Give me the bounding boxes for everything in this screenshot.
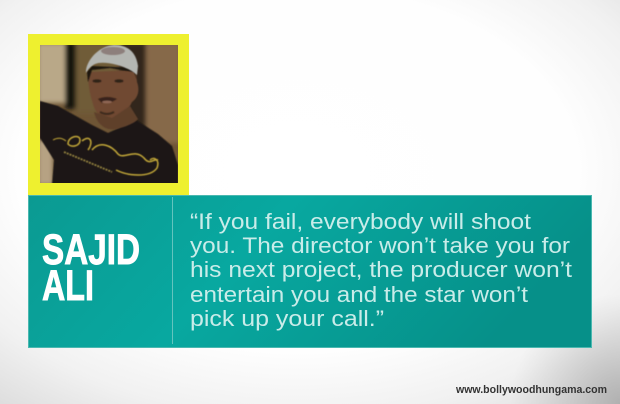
divider — [172, 197, 173, 344]
quote text: you. The director won’t take you for — [190, 233, 571, 258]
quote text — [190, 209, 573, 331]
website url: www.bollywoodhungama.com — [455, 384, 607, 396]
quote text: entertain you and the star won’t — [190, 282, 529, 307]
shirt logo — [53, 137, 158, 175]
teal quote panel — [28, 196, 592, 348]
name heading: SAJID — [42, 226, 140, 274]
face and neck — [88, 70, 138, 120]
portrait photo — [38, 43, 180, 185]
t-shirt — [40, 101, 178, 185]
hair edge — [87, 66, 137, 82]
name heading: ALI — [42, 262, 94, 310]
name heading — [42, 226, 140, 310]
yellow photo frame — [28, 34, 189, 195]
cap — [86, 45, 138, 75]
quote text: pick up your call.” — [190, 306, 384, 331]
quote text: “If you fail, everybody will shoot — [190, 209, 532, 234]
facial features — [92, 79, 124, 114]
quote text: his next project, the producer won’t — [190, 257, 573, 282]
